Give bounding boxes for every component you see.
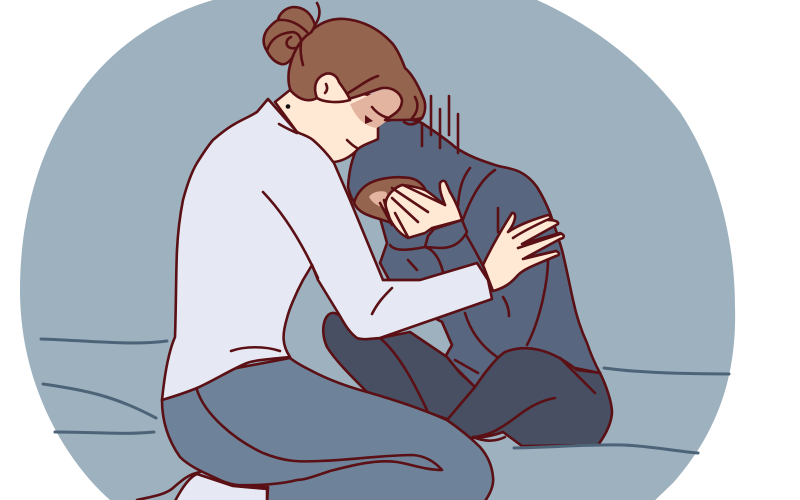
caring woman <box>137 3 564 500</box>
crouching person <box>323 119 698 453</box>
foot lines <box>137 472 200 500</box>
hair strands <box>340 76 422 124</box>
bun strands <box>267 3 319 65</box>
neck mole <box>286 104 290 109</box>
floor line front <box>514 445 698 453</box>
hoodie <box>348 119 600 400</box>
shirt folds <box>231 124 392 351</box>
white shirt <box>162 99 492 400</box>
eyelash <box>365 115 373 124</box>
comforting hand <box>483 213 564 291</box>
sadness lines <box>422 96 458 153</box>
dark trousers <box>323 313 612 446</box>
light trousers <box>162 358 493 500</box>
closed eye <box>372 107 390 118</box>
sleeve cuff <box>425 220 467 248</box>
arm cuff line <box>383 279 419 281</box>
crying person's hand over face <box>380 181 462 238</box>
neck and face <box>275 90 402 162</box>
trouser contour <box>197 390 442 485</box>
hair bun <box>264 7 315 64</box>
floor lines <box>41 339 729 433</box>
skin behind fingers <box>369 191 394 209</box>
foot <box>173 474 267 500</box>
hair of crouching person <box>354 177 426 225</box>
hair <box>288 19 425 120</box>
blush shadow on face <box>350 89 402 128</box>
mouth line <box>347 140 357 148</box>
hoodie fold lines <box>390 168 600 373</box>
ear <box>315 73 350 102</box>
